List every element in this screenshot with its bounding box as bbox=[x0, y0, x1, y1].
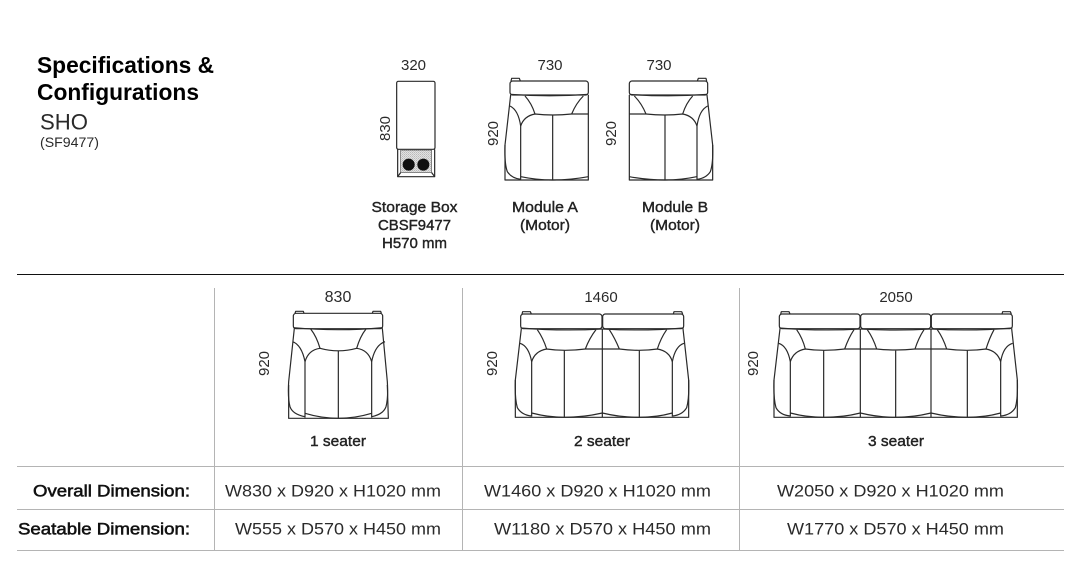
configuration: 1 seater: 830 bbox=[325, 289, 351, 306]
configuration: 1 seater bbox=[256, 289, 388, 450]
drawing: module B bbox=[629, 78, 713, 180]
row: overall dimension bbox=[33, 482, 1004, 500]
module: B: Module B bbox=[642, 199, 708, 216]
configuration: 1 seater: 1 seater bbox=[310, 433, 366, 450]
module: B: (Motor) bbox=[650, 217, 700, 234]
configuration: 3 seater bbox=[745, 289, 1017, 450]
drawing: 2 seater bbox=[515, 312, 689, 417]
product name: SHO bbox=[40, 110, 88, 134]
module: storage box: H570 mm bbox=[382, 235, 447, 252]
title: Specifications & bbox=[37, 52, 214, 78]
module: A: 730 bbox=[537, 57, 563, 74]
configuration: 3 seater: 3 seater bbox=[868, 433, 924, 450]
module: B: 730 bbox=[646, 57, 672, 74]
row: overall dimension: W830 x D920 x H1020 mm bbox=[225, 482, 441, 500]
table grid bbox=[17, 288, 1064, 551]
module: B: 920 bbox=[603, 121, 620, 146]
configuration: 2 seater bbox=[484, 289, 689, 450]
configuration: 3 seater: 2050 bbox=[879, 289, 913, 306]
configuration: 2 seater: 1460 bbox=[584, 289, 618, 306]
configuration: 3 seater: 920 bbox=[745, 351, 762, 376]
row: overall dimension: Overall Dimension: bbox=[33, 482, 190, 500]
module: A: (Motor) bbox=[520, 217, 570, 234]
drawing: 3 seater bbox=[774, 312, 1017, 417]
module: A: 920 bbox=[485, 121, 502, 146]
divider rule bbox=[17, 274, 1064, 275]
module: storage box: 320 bbox=[401, 57, 426, 74]
configuration: 2 seater: 920 bbox=[484, 351, 501, 376]
module: storage box bbox=[372, 57, 458, 252]
module: storage box: Storage Box bbox=[372, 199, 458, 216]
row: overall dimension: W1460 x D920 x H1020 mm bbox=[484, 482, 711, 500]
title bbox=[37, 52, 214, 105]
module: A: Module A bbox=[512, 199, 578, 216]
row: seatable dimension bbox=[18, 520, 1004, 538]
row: seatable dimension: W1180 x D570 x H450 mm bbox=[494, 520, 711, 538]
module: storage box: CBSF9477 bbox=[378, 217, 451, 234]
row: seatable dimension: W555 x D570 x H450 mm bbox=[235, 520, 441, 538]
drawing: 1 seater bbox=[288, 311, 388, 418]
row: seatable dimension: W1770 x D570 x H450 mm bbox=[787, 520, 1004, 538]
title: Configurations bbox=[37, 79, 199, 105]
product code: (SF9477) bbox=[40, 134, 99, 150]
drawing: module A bbox=[505, 78, 588, 180]
module: B bbox=[603, 57, 713, 234]
configuration: 2 seater: 2 seater bbox=[574, 433, 630, 450]
module: storage box: 830 bbox=[377, 116, 394, 141]
drawing: storage box bbox=[397, 81, 435, 177]
module: A bbox=[485, 57, 588, 234]
configuration: 1 seater: 920 bbox=[256, 351, 273, 376]
row: seatable dimension: Seatable Dimension: bbox=[18, 520, 190, 538]
row: overall dimension: W2050 x D920 x H1020 mm bbox=[777, 482, 1004, 500]
